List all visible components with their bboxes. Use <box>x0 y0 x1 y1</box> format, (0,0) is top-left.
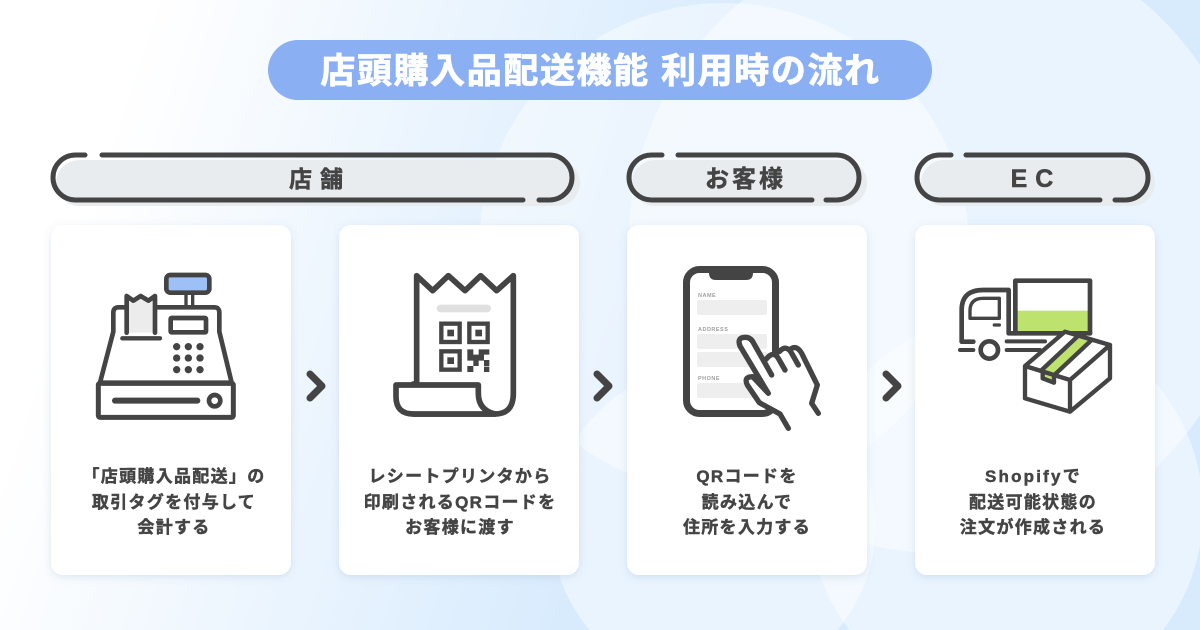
text: step 2: お客様に渡す <box>405 517 515 537</box>
text: step 2 <box>364 467 556 537</box>
arrow 2 <box>597 374 609 398</box>
text: step 4 <box>960 467 1106 537</box>
arrow 1 <box>310 374 322 398</box>
panel: receipt step <box>339 225 579 575</box>
text: step 2: レシートプリンタから <box>368 467 552 486</box>
text: step 1: 会計する <box>137 518 211 537</box>
header: 店舗: 店舗 <box>289 166 351 192</box>
text: step 3: 住所を入力する <box>683 518 811 537</box>
text: step 1 <box>82 467 266 537</box>
text: step 3: QRコードを <box>696 467 798 486</box>
panel: customer step <box>627 225 867 575</box>
text: step 1: 「店頭購入品配送」の <box>82 467 266 486</box>
header: お客様 <box>629 155 867 206</box>
panel: register step <box>51 225 291 575</box>
icon: truck and box <box>960 281 1110 412</box>
header: EC: EC <box>1011 165 1061 193</box>
icon: phone form and hand: NAME <box>698 293 716 299</box>
header: お客様: お客様 <box>705 166 786 193</box>
text: step 1: 取引タグを付与して <box>92 492 256 512</box>
icon: receipt with QR code <box>396 276 513 414</box>
text: step 4: Shopifyで <box>985 467 1081 486</box>
panel: EC step <box>915 225 1155 575</box>
text: step 2: 印刷されるQRコードを <box>364 492 556 512</box>
icon: phone form and hand <box>686 268 818 428</box>
header: EC <box>917 155 1155 206</box>
title: 店頭購入品配送機能 利用時の流れ <box>320 52 881 91</box>
icon: cash register <box>98 275 233 417</box>
arrow 3 <box>886 374 898 398</box>
text: step 3: 読み込んで <box>702 493 792 512</box>
header: 店舗 <box>53 155 580 206</box>
icon: phone form and hand: ADDRESS <box>698 327 728 333</box>
text: step 4: 注文が作成される <box>960 517 1106 537</box>
text: step 3 <box>683 467 811 537</box>
icon: phone form and hand: PHONE <box>698 376 720 382</box>
text: step 4: 配送可能状態の <box>969 492 1097 512</box>
title <box>268 40 932 100</box>
